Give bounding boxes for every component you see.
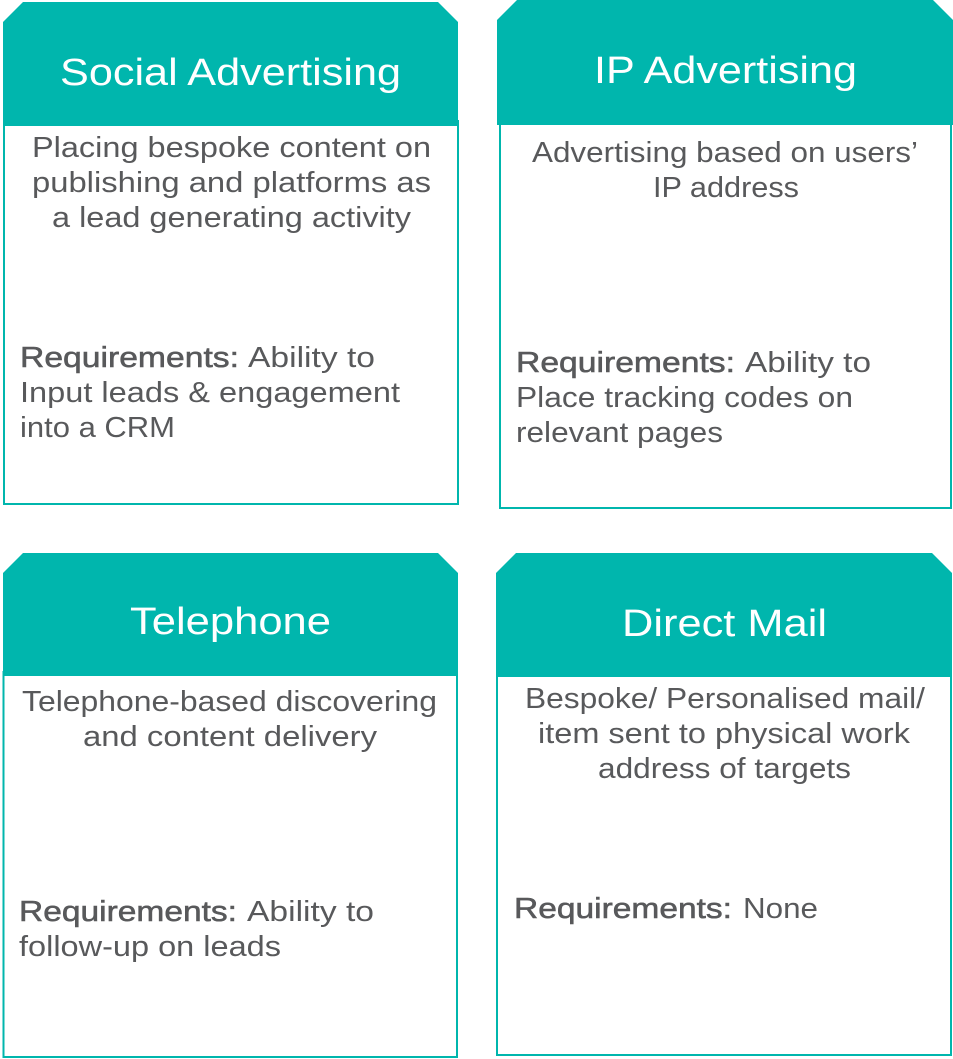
heading: Social Advertising [60,52,401,94]
description: publishing and platforms as [32,167,431,199]
heading: Telephone [130,601,331,643]
card outline [4,672,457,1057]
requirements: Input leads & engagement [20,377,400,409]
requirements: Ability to [745,347,871,379]
header banner [496,553,952,677]
description: Placing bespoke content on [32,132,431,164]
description: a lead generating activity [52,202,412,234]
description: address of targets [598,753,851,785]
description [532,137,918,204]
card outline [497,673,951,1055]
card outline [4,121,458,504]
description [32,132,431,234]
requirements: Requirements: [514,893,732,925]
description [525,683,926,785]
description: IP address [653,172,799,204]
requirements [19,896,374,963]
requirements: follow-up on leads [19,931,281,963]
description: Bespoke/ Personalised mail/ [525,683,926,715]
requirements: Requirements: [516,347,735,379]
requirements: Ability to [248,342,375,374]
requirements: None [743,893,818,925]
description: Advertising based on users’ [532,137,918,169]
requirements: Ability to [247,896,374,928]
card outline [500,121,951,508]
header banner [3,553,458,676]
description: item sent to physical work [538,718,911,750]
description [22,686,437,753]
heading: IP Advertising [594,50,857,92]
header banner [3,2,458,126]
header banner [497,0,953,125]
requirements: Place tracking codes on [516,382,853,414]
panel: IP Advertising [497,0,953,508]
description: and content delivery [83,721,378,753]
panel: Telephone [3,553,458,1057]
panel: Direct Mail [496,553,952,1055]
requirements: Requirements: [20,342,239,374]
requirements: into a CRM [20,412,175,444]
requirements [20,342,400,444]
requirements [516,347,871,449]
description: Telephone-based discovering [22,686,437,718]
requirements [514,893,818,925]
heading: Direct Mail [622,603,827,645]
panel: Social Advertising [3,2,458,504]
requirements: relevant pages [516,417,723,449]
requirements: Requirements: [19,896,237,928]
